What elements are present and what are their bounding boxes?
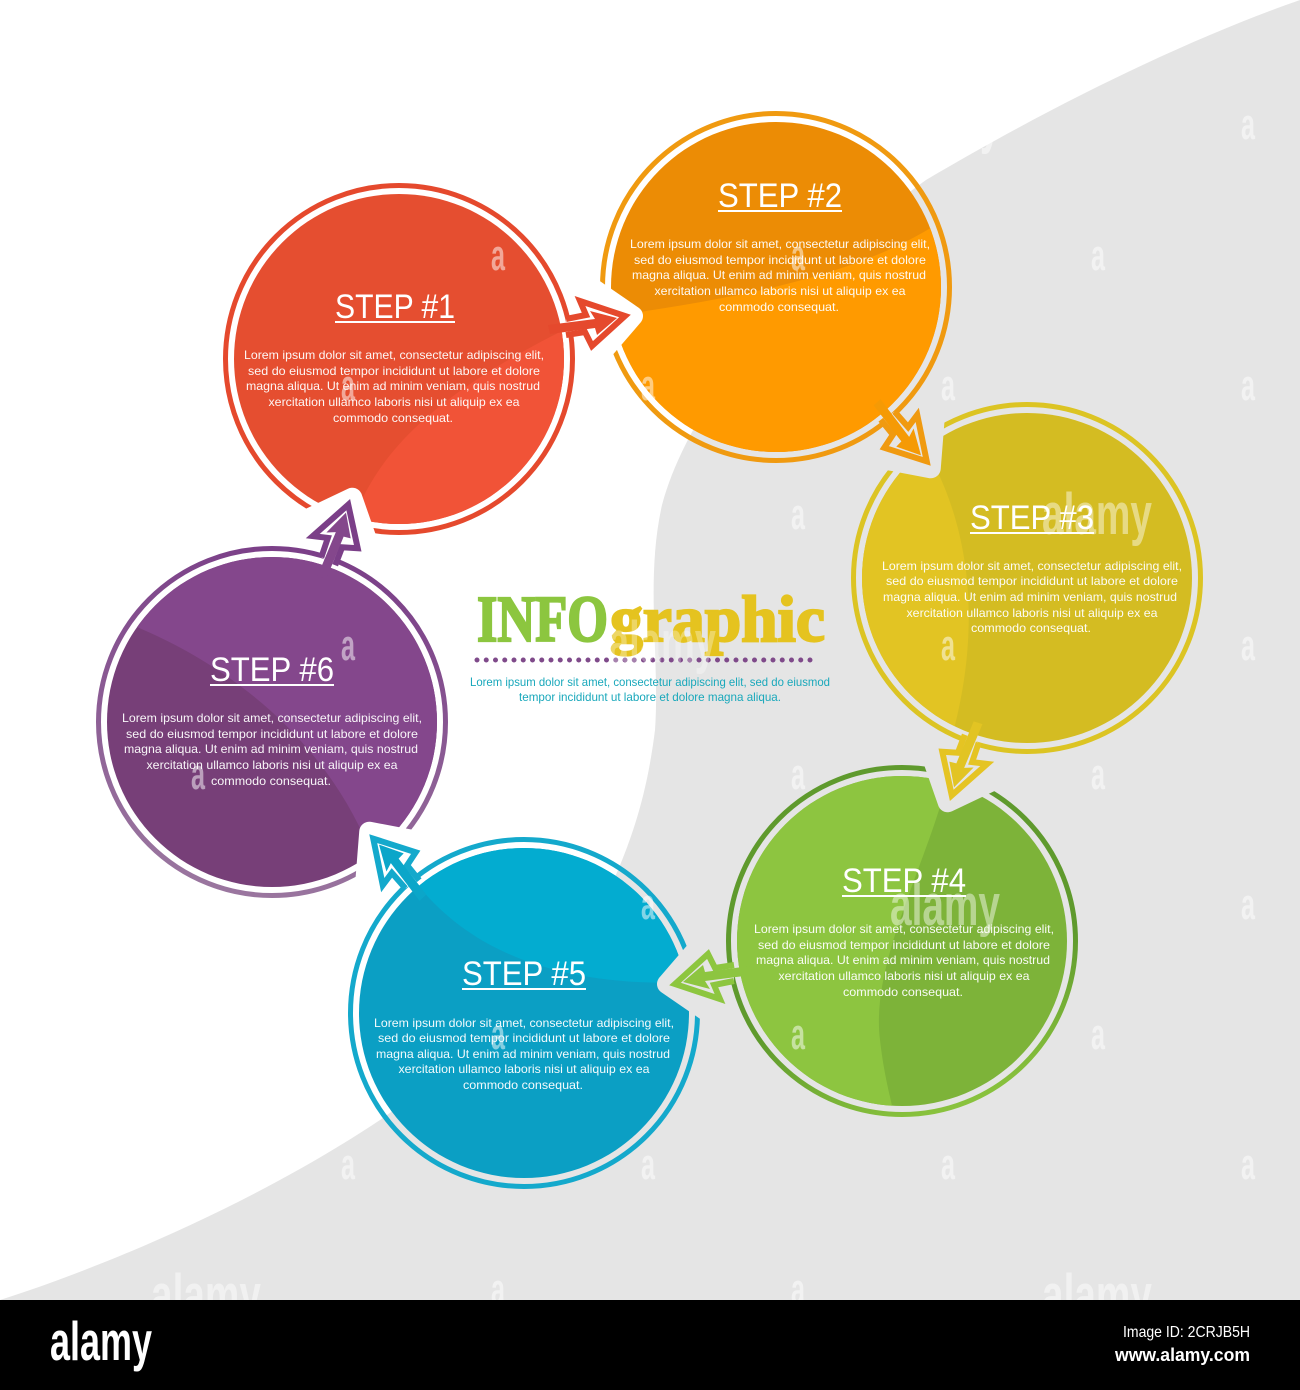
- watermark letters: a: [1091, 1010, 1105, 1059]
- arrow: step 6 to step 1: [297, 497, 374, 586]
- watermark logos: alamy: [1042, 482, 1152, 547]
- watermark letters: a: [491, 750, 505, 799]
- text block: step 6: Lorem ipsum dolor sit amet, consectetur adipiscing elit,: [122, 711, 422, 725]
- text block: step 5: Lorem ipsum dolor sit amet, consectetur adipiscing elit,: [374, 1016, 674, 1030]
- text block: step 3: magna aliqua. Ut enim ad minim veniam, quis nostrud: [883, 590, 1177, 604]
- watermark letters: a: [1091, 231, 1105, 280]
- text block: step 5: [374, 955, 674, 1092]
- watermark letters: a: [1241, 1140, 1255, 1189]
- text block: step 4: commodo consequat.: [843, 985, 963, 999]
- text block: step 1: STEP #1: [335, 288, 455, 326]
- arrow: step 4 to step 5: [675, 954, 752, 999]
- text block: step 6: sed do eiusmod tempor incididunt ut labore et dolore: [126, 727, 418, 741]
- watermark letters: a: [791, 490, 805, 539]
- text block: step 5: STEP #5: [462, 955, 586, 993]
- watermark letters: a: [1241, 880, 1255, 929]
- watermark letters: a: [491, 231, 505, 280]
- text block: step 3: xercitation ullamco laboris nisi ut aliquip ex ea: [906, 606, 1158, 620]
- text block: step 4: STEP #4: [842, 862, 966, 900]
- text block: step 4: [754, 862, 1054, 999]
- centre title: INFOgraphic: [477, 583, 825, 656]
- arrow: step 1 to step 2: [548, 301, 625, 346]
- circle: step 4: [720, 768, 1076, 1120]
- circle: step 1: [223, 183, 575, 535]
- text block: step 6: commodo consequat.: [211, 774, 331, 788]
- text block: step 5: xercitation ullamco laboris nisi ut aliquip ex ea: [398, 1062, 650, 1076]
- text block: step 5: sed do eiusmod tempor incididunt ut labore et dolore: [378, 1031, 670, 1045]
- watermark letters: y: [980, 90, 1000, 155]
- watermark letters: a: [641, 880, 655, 929]
- footer bar: [0, 1300, 1300, 1390]
- text block: step 2: Lorem ipsum dolor sit amet, consectetur adipiscing elit,: [630, 237, 930, 251]
- watermark letters: a: [191, 1010, 205, 1059]
- centre description: Lorem ipsum dolor sit amet, consectetur adipiscing elit, sed do eiusmod: [470, 675, 830, 689]
- watermark letters: a: [791, 231, 805, 280]
- text block: step 2: commodo consequat.: [719, 300, 839, 314]
- circle: step 3: [840, 404, 1200, 760]
- watermark letters: [191, 90, 1255, 1314]
- text block: step 2: magna aliqua. Ut enim ad minim veniam, quis nostrud: [632, 268, 926, 282]
- circle: step 2: [600, 114, 960, 480]
- watermark letters: a: [941, 361, 955, 410]
- text block: step 6: STEP #6: [210, 651, 334, 689]
- watermark letters: a: [491, 1010, 505, 1059]
- watermark letters: a: [791, 1265, 805, 1314]
- watermark letters: a: [941, 621, 955, 670]
- dotted divider: [477, 658, 819, 662]
- text block: step 1: [244, 288, 544, 425]
- text block: step 3: sed do eiusmod tempor incididunt ut labore et dolore: [886, 574, 1178, 588]
- text block: step 2: STEP #2: [718, 177, 842, 215]
- arrow: step 3 to step 4: [926, 714, 1003, 803]
- footer url: www.alamy.com: [1114, 1345, 1250, 1365]
- text block: step 1: xercitation ullamco laboris nisi ut aliquip ex ea: [268, 395, 520, 409]
- text block: step 3: commodo consequat.: [971, 621, 1091, 635]
- watermark logos: alamy: [151, 1263, 261, 1328]
- watermark letters: a: [1241, 621, 1255, 670]
- text block: step 5: magna aliqua. Ut enim ad minim veniam, quis nostrud: [376, 1047, 670, 1061]
- watermark letters: a: [1241, 100, 1255, 149]
- watermark letters: a: [341, 361, 355, 410]
- arrow: step 5 to step 6: [360, 824, 438, 913]
- centre description: tempor incididunt ut labore et dolore magna aliqua.: [519, 690, 781, 704]
- centre title: INFOgraphic: INFO: [477, 583, 608, 656]
- circle: step 5: [350, 830, 700, 1186]
- circle: step 6: [98, 540, 450, 896]
- text block: step 1: commodo consequat.: [333, 411, 453, 425]
- footer image id: Image ID: 2CRJB5H: [1123, 1324, 1250, 1341]
- footer logo: alamy: [50, 1310, 152, 1372]
- text block: step 4: Lorem ipsum dolor sit amet, consectetur adipiscing elit,: [754, 922, 1054, 936]
- text block: step 4: xercitation ullamco laboris nisi ut aliquip ex ea: [778, 969, 1030, 983]
- watermark letters: a: [341, 1140, 355, 1189]
- text block: step 6: [122, 651, 422, 788]
- text block: step 2: xercitation ullamco laboris nisi ut aliquip ex ea: [654, 284, 906, 298]
- centre title: INFOgraphic: graphic: [610, 583, 825, 656]
- centre description: [470, 675, 830, 704]
- text block: step 1: sed do eiusmod tempor incididunt ut labore et dolore: [248, 364, 540, 378]
- text block: step 3: Lorem ipsum dolor sit amet, consectetur adipiscing elit,: [882, 559, 1182, 573]
- text block: step 6: xercitation ullamco laboris nisi ut aliquip ex ea: [146, 758, 398, 772]
- text block: step 4: sed do eiusmod tempor incididunt ut labore et dolore: [758, 938, 1050, 952]
- text block: step 2: [630, 177, 930, 314]
- watermark letters: a: [341, 621, 355, 670]
- text block: step 1: magna aliqua. Ut enim ad minim veniam, quis nostrud: [246, 379, 540, 393]
- watermark logos: alamy: [890, 873, 1000, 938]
- watermark letters: a: [641, 361, 655, 410]
- watermark logos: alamy: [608, 610, 716, 675]
- text block: step 3: [882, 499, 1182, 635]
- watermark letters: a: [941, 1140, 955, 1189]
- watermark letters: a: [641, 1140, 655, 1189]
- watermark letters: a: [191, 750, 205, 799]
- watermark letters: a: [791, 1010, 805, 1059]
- text block: step 6: magna aliqua. Ut enim ad minim veniam, quis nostrud: [124, 742, 418, 756]
- text block: step 4: magna aliqua. Ut enim ad minim veniam, quis nostrud: [756, 953, 1050, 967]
- watermark letters: a: [1091, 750, 1105, 799]
- text block: step 3: STEP #3: [970, 499, 1094, 537]
- watermark logos: [151, 482, 1152, 1328]
- watermark letters: a: [791, 750, 805, 799]
- text block: step 5: commodo consequat.: [463, 1078, 583, 1092]
- watermark letters: a: [1241, 361, 1255, 410]
- text block: step 2: sed do eiusmod tempor incididunt ut labore et dolore: [634, 253, 926, 267]
- text block: step 1: Lorem ipsum dolor sit amet, consectetur adipiscing elit,: [244, 348, 544, 362]
- watermark logos: alamy: [1042, 1263, 1152, 1328]
- watermark letters: a: [491, 1265, 505, 1314]
- arrow: step 2 to step 3: [862, 387, 940, 476]
